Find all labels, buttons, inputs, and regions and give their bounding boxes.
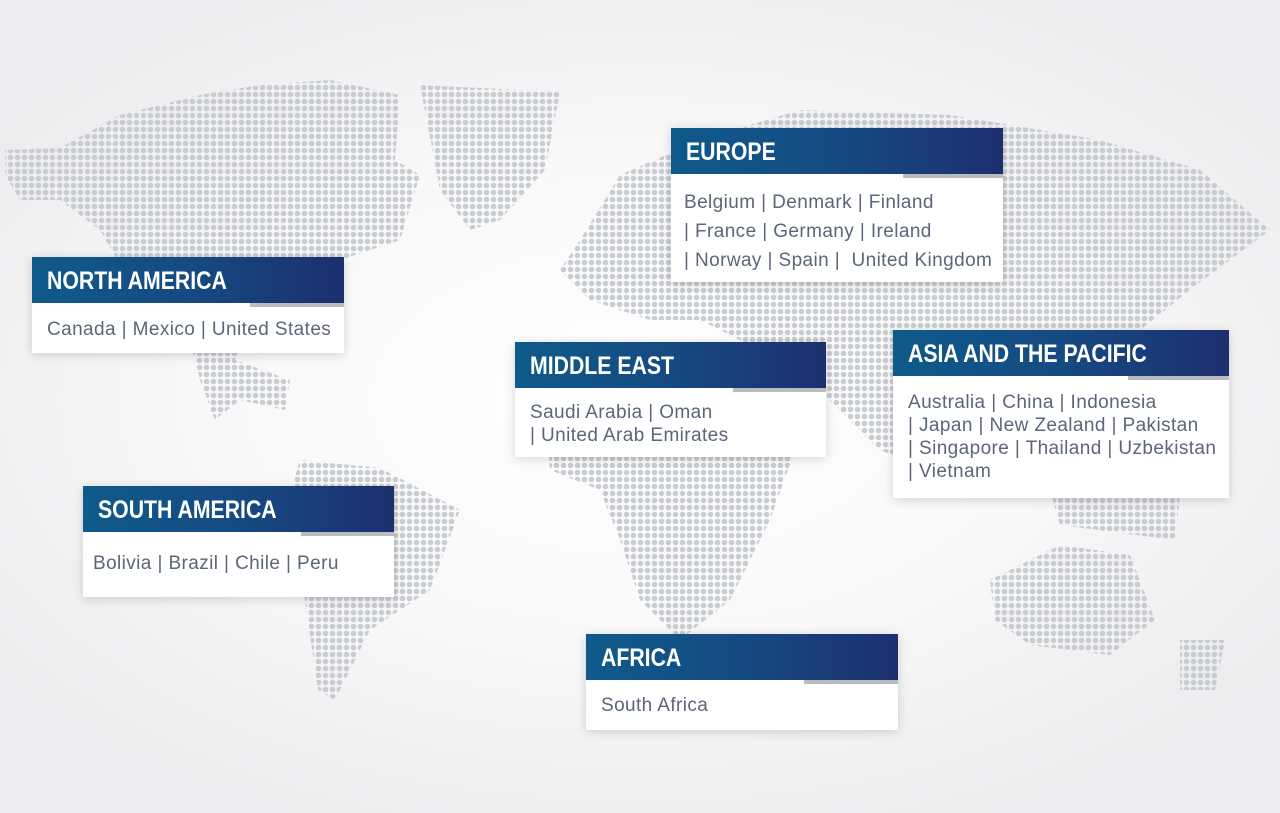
text: middle east countries: | United Arab Emirates — [530, 425, 729, 446]
text: asia countries: | Singapore | Thailand | Uzbekistan — [908, 438, 1216, 459]
text: europe countries — [684, 192, 992, 271]
text: asia countries: | Vietnam — [908, 461, 991, 482]
heading: africa — [586, 634, 898, 680]
text: asia countries: Australia | China | Indonesia — [908, 392, 1157, 413]
heading: europe — [671, 128, 1003, 174]
text: asia countries: | Japan | New Zealand | Pakistan — [908, 415, 1199, 436]
text: europe countries: | France | Germany | Ireland — [684, 221, 932, 242]
panel: africa — [586, 634, 898, 730]
heading: north america — [32, 257, 344, 303]
heading: asia and the pacific: ASIA AND THE PACIFIC — [908, 340, 1147, 368]
heading: africa: AFRICA — [601, 644, 681, 672]
heading: south america: SOUTH AMERICA — [98, 496, 277, 524]
panel: middle east — [515, 342, 826, 457]
panel: north america — [32, 257, 344, 353]
text: middle east countries: Saudi Arabia | Oman — [530, 402, 713, 423]
panel: europe — [671, 128, 1003, 282]
text: europe countries: Belgium | Denmark | Finland — [684, 192, 934, 213]
heading: middle east — [515, 342, 826, 388]
panel: asia and the pacific — [893, 330, 1229, 498]
heading: asia and the pacific — [893, 330, 1229, 376]
heading: north america: NORTH AMERICA — [47, 267, 227, 295]
text: north america countries: Canada | Mexico | United States — [47, 319, 331, 340]
panel: south america — [83, 486, 394, 597]
text: south america countries: Bolivia | Brazil | Chile | Peru — [93, 553, 339, 574]
text: europe countries: | Norway | Spain | United Kingdom — [684, 250, 992, 271]
heading: middle east: MIDDLE EAST — [530, 352, 674, 380]
text: asia countries — [908, 392, 1216, 482]
heading: south america — [83, 486, 394, 532]
text: middle east countries — [530, 402, 729, 446]
text: africa countries: South Africa — [601, 695, 708, 716]
heading: europe: EUROPE — [686, 138, 776, 166]
